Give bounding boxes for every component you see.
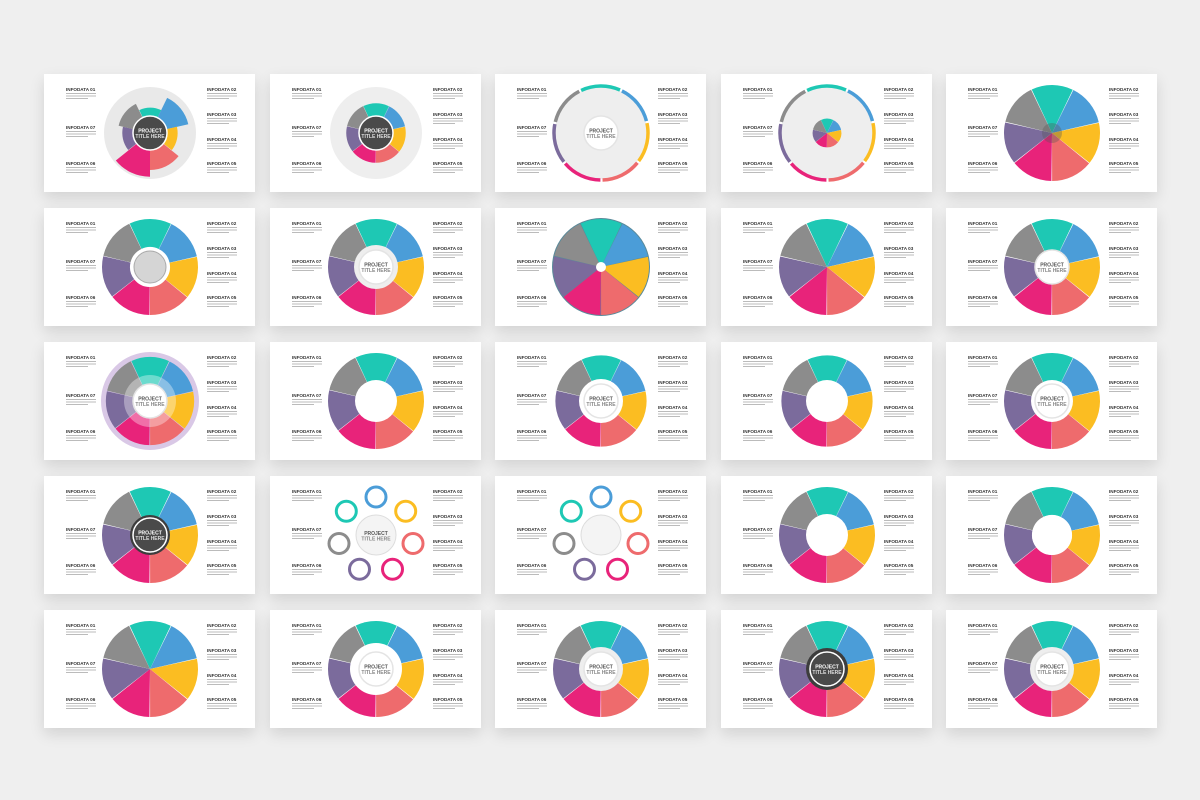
slide r4c4 — [721, 476, 932, 594]
slide r4c1 — [44, 476, 255, 594]
slide r4c2: PROJECT — [364, 531, 388, 537]
slide r3c3 — [495, 342, 706, 460]
slide r3c4 — [721, 342, 932, 460]
slide r5c4 — [721, 610, 932, 728]
slide r2c1 — [44, 208, 255, 326]
slide r4c2: TITLE HERE — [361, 536, 391, 542]
slide r5c2 — [270, 610, 481, 728]
slide r3c2 — [270, 342, 481, 460]
slide r5c3 — [495, 610, 706, 728]
slide r5c1 — [44, 610, 255, 728]
slide r2c4 — [721, 208, 932, 326]
slide r4c2 — [270, 476, 481, 594]
slide r4c3 — [495, 476, 706, 594]
slide r1c4 — [721, 74, 932, 192]
slide r2c5 — [946, 208, 1157, 326]
slide r1c5 — [946, 74, 1157, 192]
slide r1c3 — [495, 74, 706, 192]
slide r3c5 — [946, 342, 1157, 460]
slide r5c5 — [946, 610, 1157, 728]
slide r1c1 — [44, 74, 255, 192]
slide r4c5 — [946, 476, 1157, 594]
slide r2c3 — [495, 208, 706, 326]
slide r2c2 — [270, 208, 481, 326]
slide r1c2 — [270, 74, 481, 192]
slide r3c1 — [44, 342, 255, 460]
